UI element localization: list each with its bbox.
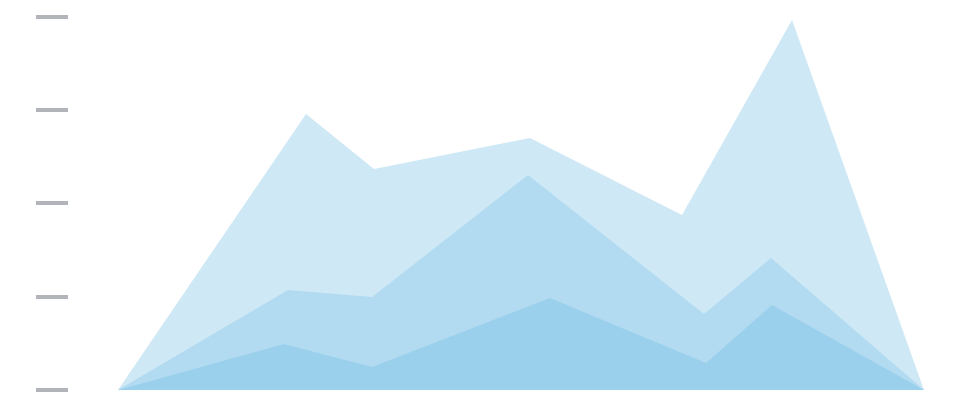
area series 1 (back, lightest) (118, 20, 924, 390)
area series 3 (front, darkest) (118, 298, 924, 390)
y-axis tick marks (36, 15, 68, 392)
area series 2 (middle) (118, 175, 924, 390)
